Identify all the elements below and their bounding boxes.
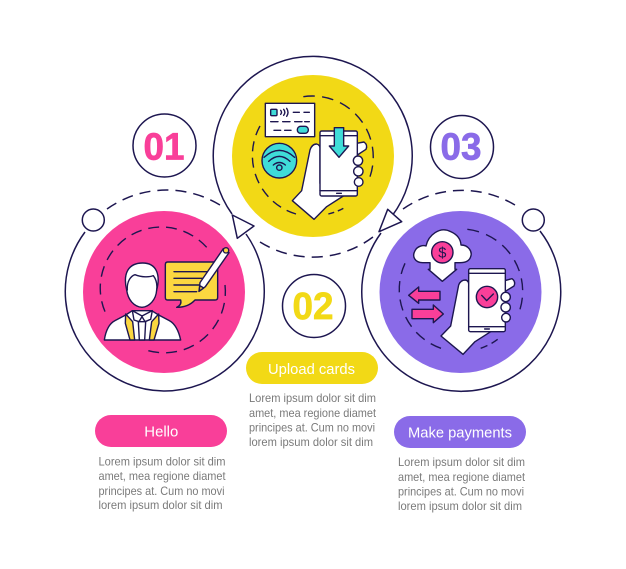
text block: Hello description <box>98 454 226 512</box>
number 01 <box>133 114 196 177</box>
text block: Upload cards description: amet, mea regione diamet <box>249 406 377 420</box>
download arrow <box>329 128 349 157</box>
arrow: step 1 to step 2 <box>232 215 254 238</box>
pill heading: Upload cards <box>246 352 378 384</box>
icon: businessman with speech bubble <box>100 227 229 353</box>
icon: cloud payment and phone <box>399 229 523 354</box>
pencil <box>199 249 229 291</box>
text block: Hello description: amet, mea regione diamet <box>98 469 226 483</box>
number 02: 02 <box>292 286 334 328</box>
exchange arrows <box>409 287 440 303</box>
text block: Upload cards description: Lorem ipsum dolor sit dim <box>249 391 376 405</box>
text block: Hello description: principes at. Cum no movi <box>98 484 224 498</box>
number 02 <box>282 274 346 338</box>
text block: Make payments description <box>398 455 526 513</box>
number 01: 01 <box>144 126 184 168</box>
pill heading: Make payments: Make payments <box>408 424 512 441</box>
hand and phone <box>292 131 367 219</box>
icon: cloud payment and phone: $ <box>438 245 446 261</box>
number 03: 03 <box>440 126 482 168</box>
jacket <box>104 311 181 340</box>
icon: card, wireless and phone <box>252 96 373 219</box>
text block: Upload cards description: principes at. Cum no movi <box>249 420 375 434</box>
hand and phone <box>441 269 515 354</box>
text block: Hello description: Lorem ipsum dolor sit dim <box>98 454 226 468</box>
text block: Upload cards description: lorem ipsum dolor sit dim <box>249 435 373 449</box>
panel: step 3 ring and circle <box>362 190 561 391</box>
pill heading: Upload cards: Upload cards <box>268 361 355 378</box>
arrow: step 2 to step 3 <box>379 209 402 232</box>
pill heading: Hello: Hello <box>144 424 178 441</box>
bank card <box>265 103 315 137</box>
number 03 <box>430 116 494 178</box>
pill heading: Hello <box>95 415 227 447</box>
pill heading: Make payments <box>394 416 526 448</box>
text block: Upload cards description <box>249 391 377 449</box>
head <box>125 263 158 307</box>
text block: Make payments description: amet, mea regione diamet <box>398 470 526 484</box>
speech bubble <box>165 262 218 307</box>
panel: step 2 ring and circle <box>213 56 412 257</box>
check badge <box>476 286 498 308</box>
wireless badge <box>262 143 297 178</box>
cloud <box>414 230 471 281</box>
text block: Make payments description: lorem ipsum dolor sit dim <box>398 499 522 513</box>
panel: step 1 ring and circle <box>65 190 264 391</box>
text block: Make payments description: Lorem ipsum dolor sit dim <box>398 455 525 469</box>
text block: Make payments description: principes at. Cum no movi <box>398 484 524 498</box>
text block: Hello description: lorem ipsum dolor sit dim <box>98 498 222 512</box>
